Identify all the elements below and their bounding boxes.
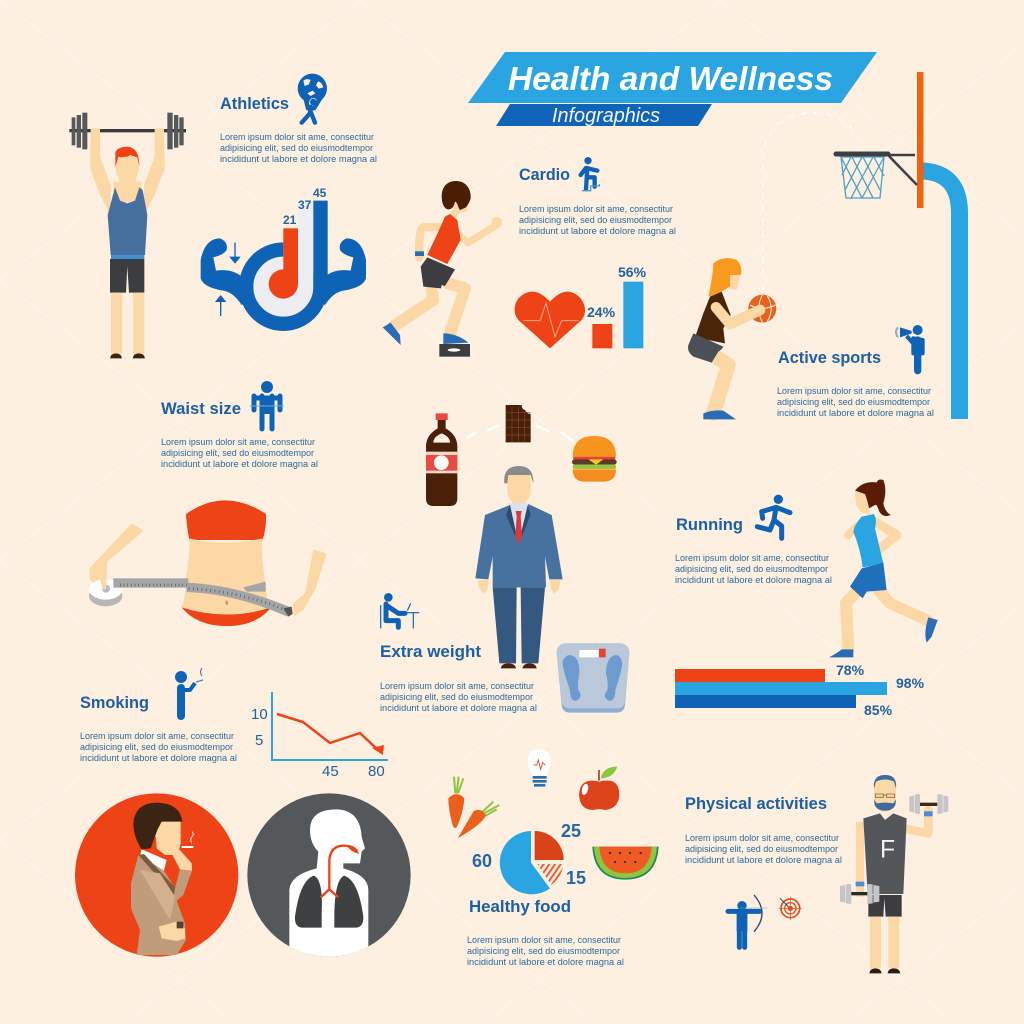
text: waist size: Lorem ipsum dolor sit ame, consectitur (161, 437, 315, 447)
heading: running: Running (676, 515, 743, 534)
heading: healthy food: Healthy food (469, 897, 571, 916)
title banner: Infographics (552, 105, 660, 127)
icon: person waist (250, 381, 284, 429)
heading: waist size: Waist size (161, 399, 241, 418)
heading: cardio: Cardio (519, 165, 570, 184)
text: extra weight: incididunt ut labore et dolore magna al (380, 703, 537, 713)
chart: heart with 24% and 56% bars: 24% (587, 304, 616, 320)
icon: person with megaphone (896, 325, 923, 371)
icon: man holding globe (298, 74, 327, 123)
text: cardio: incididunt ut labore et dolore magna al (519, 226, 676, 236)
text: cardio (519, 204, 676, 236)
text: active sports (777, 386, 934, 418)
chart: smoking line chart: 5 (255, 732, 263, 749)
chart: heart with 24% and 56% bars (514, 264, 647, 348)
figure: bearded man with dumbbells: F (880, 836, 895, 863)
figure: overweight man in suit (475, 466, 563, 668)
circle: smoker (75, 793, 238, 957)
text: smoking: Lorem ipsum dolor sit ame, consectitur (80, 731, 234, 741)
chart: smoking line chart (251, 692, 388, 780)
text: healthy food: adipisicing elit, sed do eiusmodtempor (467, 946, 620, 956)
figure: weightlifter (69, 113, 186, 358)
chart: running bars 78% 98% 85% (675, 662, 925, 718)
illustration: waist with measuring tape (89, 500, 327, 626)
title banner: Health and Wellness (508, 60, 833, 97)
text: smoking: adipisicing elit, sed do eiusmodtempor (80, 742, 233, 752)
text: physical activities: incididunt ut labore et dolore magna al (685, 855, 842, 865)
chart: food pie 60 25 15: 15 (566, 868, 586, 888)
figure: woman with basketball (688, 258, 776, 419)
chart: running bars 78% 98% 85%: 85% (864, 702, 893, 718)
text: healthy food: incididunt ut labore et dolore magna al (467, 957, 624, 967)
icon: running person (757, 495, 790, 538)
icon: apple (579, 767, 619, 810)
text: active sports: adipisicing elit, sed do eiusmodtempor (777, 397, 930, 407)
text: waist size: incididunt ut labore et dolore magna al (161, 459, 318, 469)
chart: biceps dial 21 37 45: 37 (298, 198, 312, 212)
chart: heart with 24% and 56% bars: 56% (618, 264, 647, 280)
chart: biceps dial 21 37 45: 21 (283, 213, 297, 227)
barbell (69, 113, 186, 149)
text: active sports: Lorem ipsum dolor sit ame, consectitur (777, 386, 931, 396)
chart: food pie 60 25 15: 60 (472, 851, 492, 871)
basketball hoop (763, 72, 960, 419)
text: extra weight: adipisicing elit, sed do eiusmodtempor (380, 692, 533, 702)
text: cardio: adipisicing elit, sed do eiusmodtempor (519, 215, 672, 225)
title banner (468, 52, 877, 127)
icon: bathroom scale (557, 643, 629, 713)
chart: food pie 60 25 15 (472, 821, 586, 894)
icon: target (779, 897, 802, 920)
text: athletics (220, 132, 377, 164)
icon: person smoking (175, 668, 203, 716)
dashes linking food to man (467, 426, 572, 440)
text: extra weight (380, 681, 537, 713)
figure: bearded man with dumbbells (840, 775, 948, 973)
chart: biceps dial 21 37 45 (201, 186, 366, 324)
text: athletics: incididunt ut labore et dolore magna al (220, 154, 377, 164)
icon: chocolate bar (506, 405, 531, 442)
text: physical activities: Lorem ipsum dolor sit ame, consectitur (685, 833, 839, 843)
icon: burger (572, 436, 617, 482)
text: running: Lorem ipsum dolor sit ame, consectitur (675, 553, 829, 563)
icon: person at desk (381, 593, 419, 628)
text: smoking: incididunt ut labore et dolore magna al (80, 753, 237, 763)
chart: smoking line chart: 10 (251, 706, 268, 723)
heading: athletics: Athletics (220, 94, 289, 113)
heading: active sports: Active sports (778, 348, 881, 367)
circle: lungs (247, 793, 411, 957)
text: smoking (80, 731, 237, 763)
icon: light bulb (528, 749, 551, 785)
figure: woman running (829, 480, 938, 657)
text: running: adipisicing elit, sed do eiusmodtempor (675, 564, 828, 574)
text: waist size (161, 437, 318, 469)
text: athletics: adipisicing elit, sed do eiusmodtempor (220, 143, 373, 153)
text: healthy food: Lorem ipsum dolor sit ame, consectitur (467, 935, 621, 945)
icon: soda bottle (426, 413, 457, 506)
chart: smoking line chart: 45 (322, 763, 339, 780)
heading: extra weight: Extra weight (380, 642, 481, 661)
text: physical activities: adipisicing elit, sed do eiusmodtempor (685, 844, 838, 854)
text: physical activities (685, 833, 842, 865)
text: waist size: adipisicing elit, sed do eiusmodtempor (161, 448, 314, 458)
upper dumbbell (909, 794, 948, 816)
icon: watermelon (592, 847, 659, 880)
icon: person on stairs (581, 157, 599, 191)
text: cardio: Lorem ipsum dolor sit ame, consectitur (519, 204, 673, 214)
heading: physical activities: Physical activities (685, 794, 827, 813)
heading: smoking: Smoking (80, 693, 149, 712)
text: running: incididunt ut labore et dolore magna al (675, 575, 832, 585)
chart: running bars 78% 98% 85%: 98% (896, 675, 925, 691)
text: athletics: Lorem ipsum dolor sit ame, consectitur (220, 132, 374, 142)
icon: carrots (448, 777, 499, 838)
text: active sports: incididunt ut labore et dolore magna al (777, 408, 934, 418)
chart: food pie 60 25 15: 25 (561, 821, 581, 841)
chart: biceps dial 21 37 45: 45 (313, 186, 327, 200)
chart: running bars 78% 98% 85%: 78% (836, 662, 865, 678)
text: extra weight: Lorem ipsum dolor sit ame, consectitur (380, 681, 534, 691)
figure: cardio runner on step (383, 181, 502, 357)
icon: archer (728, 895, 767, 947)
lower dumbbell (840, 882, 879, 904)
text: running (675, 553, 832, 585)
text: healthy food (467, 935, 624, 967)
chart: smoking line chart: 80 (368, 763, 385, 780)
